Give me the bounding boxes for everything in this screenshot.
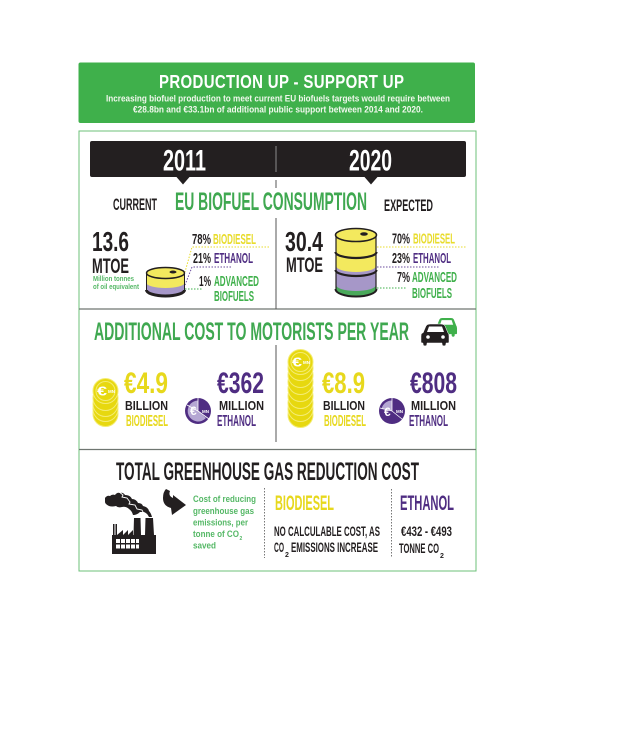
year bar — [90, 141, 466, 184]
leader lines 2011 — [185, 247, 269, 289]
cost explanation: greenhouse gas — [193, 506, 254, 517]
2011 total: MTOE — [92, 255, 129, 278]
heading: motorist cost: ADDITIONAL COST TO MOTORISTS PER YEAR — [94, 318, 409, 346]
banner title: PRODUCTION UP - SUPPORT UP — [159, 71, 404, 92]
infographic: BIODIESEL — [126, 413, 168, 430]
2011 shares — [192, 231, 259, 305]
centre divider — [275, 180, 277, 442]
2020 shares: 7% — [397, 269, 410, 286]
ethanol reduction cost — [399, 492, 454, 560]
ethanol reduction cost: €432 - €493 — [401, 523, 452, 539]
2020 total: 30.4 — [285, 226, 323, 257]
cost explanation: emissions, per — [193, 518, 248, 528]
biodiesel reduction cost: 2 — [285, 552, 289, 559]
panel: outer frame — [79, 131, 476, 571]
biodiesel reduction cost — [274, 492, 380, 559]
heading: consumption: EU BIOFUEL CONSUMPTION — [175, 188, 367, 216]
2011 shares: ETHANOL — [214, 250, 253, 267]
2011 total: 13.6 — [92, 226, 129, 257]
banner text: €28.8bn and €33.1bn of additional public support between 2014 and 2020. — [133, 104, 423, 116]
2011 total: Million tonnes — [93, 276, 134, 283]
biodiesel reduction cost: NO CALCULABLE COST, AS — [274, 523, 380, 539]
2020 biodiesel cost: €8.9 — [322, 367, 365, 400]
2011 ethanol cost: €362 — [217, 367, 264, 400]
icon: cars — [421, 318, 457, 346]
2020 ethanol cost: ETHANOL — [409, 413, 448, 430]
leader lines 2020 — [377, 247, 467, 288]
icon: coin stack 2020: € — [292, 354, 302, 370]
2020 shares: 70% — [392, 230, 410, 248]
banner text — [106, 94, 450, 116]
cost explanation: 2 — [240, 536, 242, 542]
2020 ethanol cost: €808 — [410, 367, 457, 400]
cost explanation: tonne of CO — [193, 529, 239, 540]
2020 shares: 23% — [392, 250, 410, 267]
icon: ethanol pie 2020 — [379, 398, 405, 424]
2020 shares: BIODIESEL — [413, 230, 455, 248]
2011 biodiesel cost: BILLION — [125, 399, 168, 413]
ethanol reduction cost: TONNE CO — [399, 540, 439, 556]
heading: consumption: EXPECTED — [384, 196, 433, 215]
2020 shares: BIOFUELS — [412, 285, 452, 302]
icon: small barrel — [146, 268, 184, 296]
cost explanation: Cost of reducing — [193, 494, 256, 505]
icon: ethanol pie 2020: € — [384, 405, 391, 419]
biodiesel reduction cost: EMISSIONS INCREASE — [291, 539, 378, 555]
infographic: BIODIESEL — [324, 413, 366, 430]
2020 shares: ADVANCED — [412, 269, 457, 286]
2020 biodiesel cost — [322, 367, 366, 430]
2011 total: of oil equivalent — [93, 284, 140, 291]
year 2020: 2020 — [349, 144, 392, 178]
biodiesel reduction cost: CO — [274, 539, 284, 555]
2020 ethanol cost — [409, 367, 457, 430]
icon: ethanol pie 2011: MN — [202, 409, 209, 414]
2020 biodiesel cost: BILLION — [323, 399, 365, 413]
cost explanation: saved — [193, 540, 216, 552]
biodiesel reduction cost: BIODIESEL — [275, 492, 334, 515]
2011 shares: BIODIESEL — [213, 231, 256, 248]
2011 shares: 1% — [199, 273, 211, 290]
2011 biodiesel cost: €4.9 — [124, 367, 168, 400]
2020 shares — [392, 230, 457, 302]
icon: factory — [105, 491, 156, 554]
banner: production up — [78, 62, 475, 123]
heading: consumption: CURRENT — [113, 195, 157, 214]
icon: ethanol pie 2011 — [185, 398, 211, 424]
2011 ethanol cost: ETHANOL — [217, 413, 256, 430]
icon: large barrel — [336, 228, 376, 297]
2011 biodiesel cost — [124, 367, 168, 430]
icon: ethanol pie 2011: € — [190, 404, 197, 418]
2020 ethanol cost: MILLION — [411, 399, 456, 413]
2011 shares: ADVANCED — [214, 273, 259, 290]
cost explanation — [193, 494, 256, 552]
icon: coin stack 2020 — [288, 350, 313, 428]
icon: curved arrow — [163, 489, 186, 515]
2020 total — [285, 226, 323, 277]
2011 shares: 78% — [192, 231, 211, 248]
heading: consumption — [113, 188, 433, 216]
icon: coin stack 2020: MN — [303, 360, 310, 365]
section dividers — [79, 309, 476, 450]
icon: coin stack 2011 — [93, 378, 118, 426]
2011 shares: 21% — [193, 250, 211, 267]
2011 total — [92, 226, 140, 291]
year 2011: 2011 — [163, 144, 206, 178]
2011 shares: BIOFUELS — [214, 288, 254, 305]
icon: coin stack 2011: MN — [108, 389, 115, 394]
banner text: Increasing biofuel production to meet current EU biofuels targets would require between — [106, 94, 450, 104]
dotted separators — [264, 488, 392, 558]
2011 ethanol cost: MILLION — [219, 399, 264, 413]
ethanol reduction cost: 2 — [440, 553, 444, 560]
2020 total: MTOE — [286, 254, 323, 277]
2011 ethanol cost — [217, 367, 264, 430]
ethanol reduction cost: ETHANOL — [400, 492, 454, 515]
icon: ethanol pie 2020: MN — [396, 409, 403, 414]
2020 shares: ETHANOL — [413, 250, 451, 267]
icon: coin stack 2011: € — [97, 384, 107, 398]
